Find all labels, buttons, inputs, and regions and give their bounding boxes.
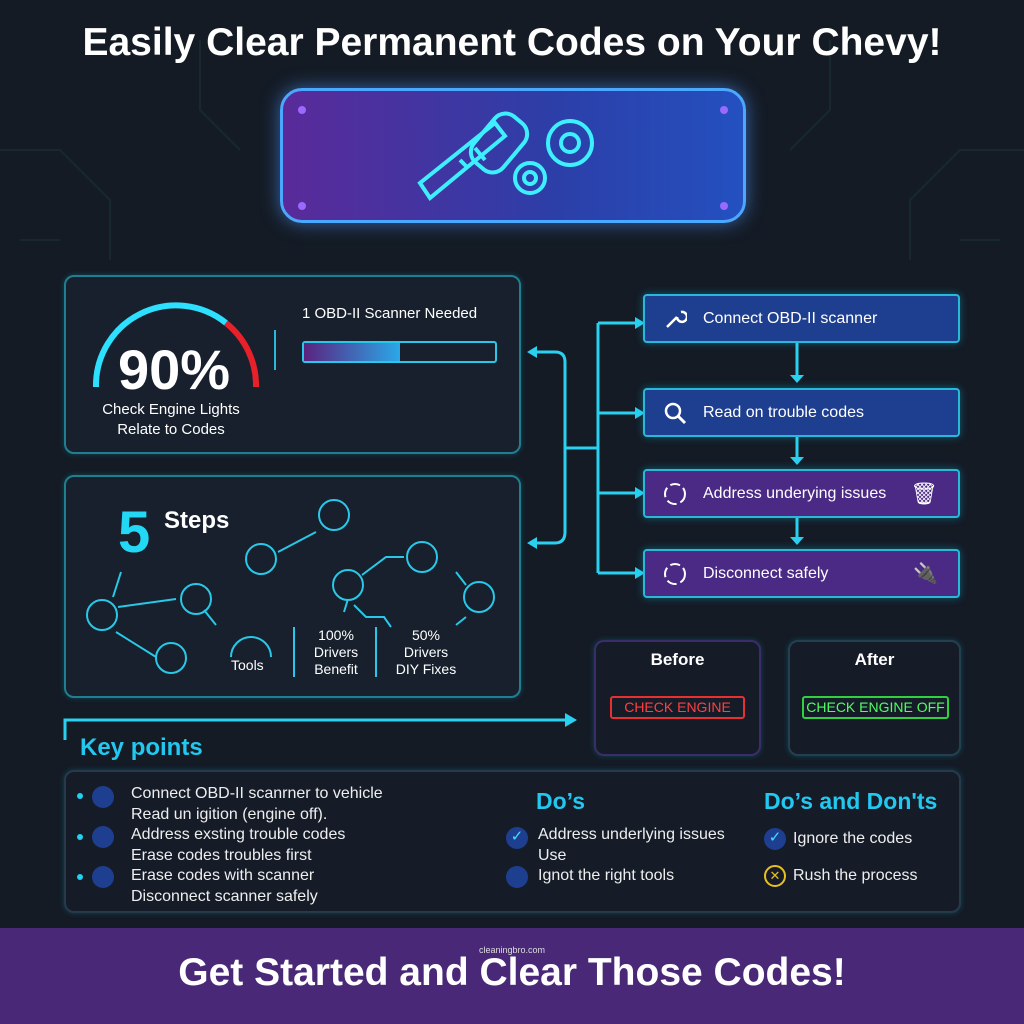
dos and donts column: Ignore the codes	[793, 830, 912, 847]
panel: 5 steps: Drivers	[404, 644, 448, 660]
panel: 5 steps: Benefit	[314, 661, 358, 677]
caption: Check Engine Lights	[102, 401, 240, 418]
bullet list: Erase codes with scanner	[131, 867, 314, 884]
caption	[102, 401, 240, 438]
bullet list	[77, 785, 383, 904]
bullet list: Connect OBD-II scanrner to vehicle	[131, 785, 383, 802]
panel: stats	[64, 275, 521, 454]
bullet list: Erase codes troubles first	[131, 846, 312, 864]
scanner bar: 1 OBD-II Scanner Needed	[302, 305, 477, 322]
footer banner: Get Started and Clear Those Codes!	[178, 951, 846, 994]
tool network	[86, 499, 495, 677]
90%: 90%	[118, 338, 230, 401]
step 3	[643, 469, 960, 518]
step 4: Disconnect safely	[703, 564, 828, 582]
panel: 5 steps: DIY Fixes	[396, 661, 456, 677]
dos and donts column: ✓	[769, 829, 781, 846]
step down arrows	[790, 343, 804, 545]
step 1: Connect OBD-II scanner	[703, 310, 877, 326]
before box	[594, 640, 761, 756]
bullet list: Disconnect scanner safely	[131, 888, 318, 904]
key points heading: Key points	[80, 734, 203, 761]
panel: 5 steps: Drivers	[314, 644, 358, 660]
panel: key points and dos	[64, 770, 961, 913]
step 3: Address underying issues	[703, 484, 886, 502]
dos column	[506, 788, 725, 888]
step 2: Read on trouble codes	[703, 404, 864, 420]
step 4: 🔌	[913, 563, 938, 585]
after box: CHECK ENGINE OFF	[806, 699, 945, 715]
dos and donts column	[764, 788, 937, 887]
step 1	[643, 294, 960, 343]
dos column: Use	[538, 846, 566, 864]
after box: After	[855, 650, 894, 669]
before box: Before	[651, 650, 704, 669]
panel: 5 steps: 100%	[318, 627, 354, 643]
stat labels: Tools	[231, 657, 264, 673]
dos and donts column: Rush the process	[793, 866, 918, 884]
caption: Relate to Codes	[117, 421, 225, 438]
connector arrows	[527, 317, 643, 579]
arrow to before	[64, 713, 577, 740]
dos column: Address underlying issues	[538, 826, 725, 843]
step 4	[643, 549, 960, 598]
panel: 5 steps: Steps	[164, 507, 229, 534]
dos and donts column: Do’s and Don'ts	[764, 788, 937, 814]
dos column: Do’s	[536, 788, 585, 814]
step 2	[643, 388, 960, 437]
step 3: 🗑	[910, 480, 938, 506]
bullet list: Address exsting trouble codes	[131, 826, 345, 843]
footer banner	[0, 928, 1024, 1024]
footer banner: cleaningbro.com	[479, 945, 545, 955]
panel: 5 steps: 50%	[412, 627, 440, 643]
gauge	[93, 302, 259, 387]
5 steps heading: 5	[118, 500, 150, 565]
bullet list: Read un igition (engine off).	[131, 806, 327, 822]
after box	[788, 640, 961, 756]
title: Easily Clear Permanent Codes on Your Chevy!	[82, 21, 942, 64]
dos column: ✓	[511, 828, 523, 845]
banner with key and gears icon	[280, 88, 746, 223]
panel: 5 steps	[64, 475, 521, 698]
dos and donts column: ✕	[770, 868, 780, 882]
scanner bar	[274, 305, 497, 370]
dos column: Ignot the right tools	[538, 867, 674, 884]
before box: CHECK ENGINE	[624, 699, 731, 715]
